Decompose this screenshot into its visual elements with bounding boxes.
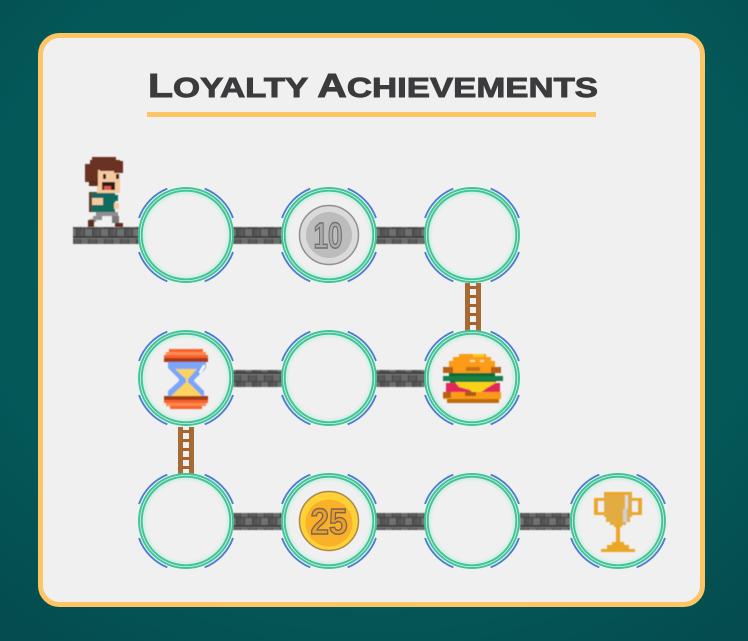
path: stone bridge 3 xyxy=(233,370,282,387)
ladder: row 2 to row 3 xyxy=(178,427,194,475)
icon: gold coin 25: 25 xyxy=(310,501,348,542)
node 7: empty xyxy=(139,474,233,568)
node 6: ring xyxy=(425,331,519,425)
title underline xyxy=(147,112,596,117)
title: LOYALTY ACHIEVEMENTS xyxy=(148,67,598,104)
path: stone bridge 1 xyxy=(233,227,282,244)
node 4: ring xyxy=(139,331,233,425)
node 10: ring xyxy=(571,474,665,568)
icon: silver coin 10: 10 xyxy=(314,215,342,256)
path: stone platform start xyxy=(73,227,139,244)
node 5: empty xyxy=(282,331,376,425)
node 3: empty xyxy=(425,188,519,282)
node 9: empty xyxy=(425,474,519,568)
panel: achievements card xyxy=(40,36,702,604)
path: stone bridge 6 xyxy=(376,513,425,530)
icon: burger xyxy=(443,354,503,403)
path: stone bridge 5 xyxy=(233,513,282,530)
path: stone bridge 4 xyxy=(376,370,425,387)
icon: pixel character xyxy=(85,157,123,227)
node 2: ring xyxy=(282,188,376,282)
node 8: ring xyxy=(282,474,376,568)
icon: silver coin 10 xyxy=(300,206,358,264)
icon: gold coin 25 xyxy=(300,492,358,550)
ladder: row 1 to row 2 xyxy=(465,283,481,331)
path: stone bridge 2 xyxy=(376,227,425,244)
node 1: empty xyxy=(139,188,233,282)
icon: hourglass xyxy=(164,349,208,409)
icon: trophy xyxy=(594,492,642,552)
path: stone bridge 7 xyxy=(520,513,570,530)
